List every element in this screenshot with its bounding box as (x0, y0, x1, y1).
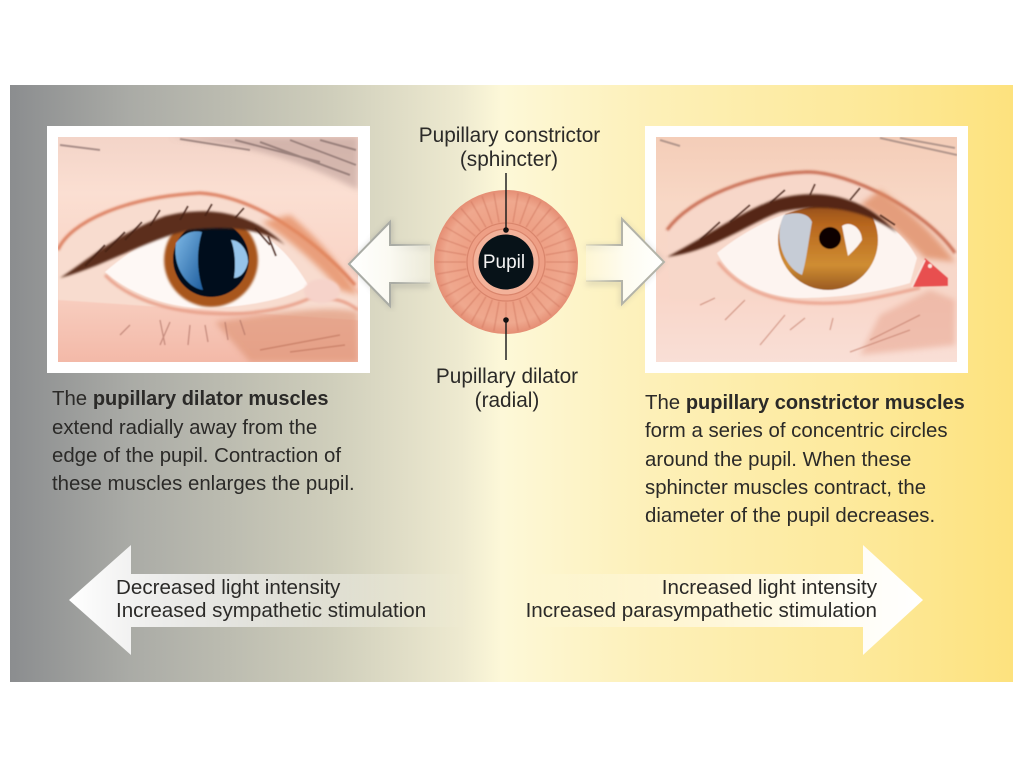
upper lid (675, 173, 948, 287)
arrow: increased light (530, 545, 923, 655)
text: dilator description: these muscles enlarges the pupil. (52, 473, 355, 495)
text: dilator description: extend radially away from the (52, 417, 317, 439)
text: decreased light intensity: Increased sympathetic stimulation (116, 599, 426, 622)
text: constrictor description: form a series of concentric circles (645, 420, 948, 442)
pupil label: Pupil (483, 252, 525, 273)
radial muscle lines (436, 192, 576, 332)
pointer: dilator (503, 317, 509, 360)
pointer: constrictor (503, 173, 509, 233)
lower lid (105, 275, 358, 314)
caruncle (912, 258, 948, 287)
caruncle (304, 279, 340, 303)
sclera (717, 204, 917, 298)
upper lid (58, 193, 358, 320)
text: constrictor description: sphincter muscles contract, the (645, 477, 926, 499)
iris muscle diagram (434, 190, 578, 334)
text: dilator description: edge of the pupil. Contraction of (52, 445, 341, 467)
text: constrictor description: The pupillary constrictor muscles (645, 392, 965, 414)
text: dilator description: The pupillary dilator muscles (52, 388, 328, 410)
label: pupillary constrictor: Pupillary constrictor (419, 124, 600, 147)
arrow: decreased light (69, 545, 470, 655)
text: decreased light intensity: Decreased light intensity (116, 576, 341, 599)
sclera (105, 222, 308, 308)
pupil (478, 234, 534, 290)
text: increased light intensity: Increased parasympathetic stimulation (526, 599, 877, 622)
arrow: to dilated eye (349, 222, 430, 306)
eyebrow (170, 137, 358, 190)
label: pupillary constrictor: (sphincter) (460, 148, 558, 171)
iris (164, 213, 258, 307)
lashes (60, 211, 285, 278)
arrow: to constricted eye (586, 219, 664, 304)
text: constrictor description: diameter of the pupil decreases. (645, 505, 935, 527)
pupil (819, 227, 841, 249)
label: pupillary dilator: (radial) (475, 389, 539, 412)
label: pupillary dilator: Pupillary dilator (436, 365, 578, 388)
background panel (10, 85, 1013, 682)
iris (777, 206, 879, 291)
lower lid (718, 262, 920, 303)
text: constrictor description: around the pupil. When these (645, 449, 911, 471)
text: increased light intensity: Increased light intensity (662, 576, 878, 599)
lashes (667, 194, 897, 257)
photo: dilated eye (47, 126, 370, 373)
photo: constricted eye (645, 126, 968, 373)
